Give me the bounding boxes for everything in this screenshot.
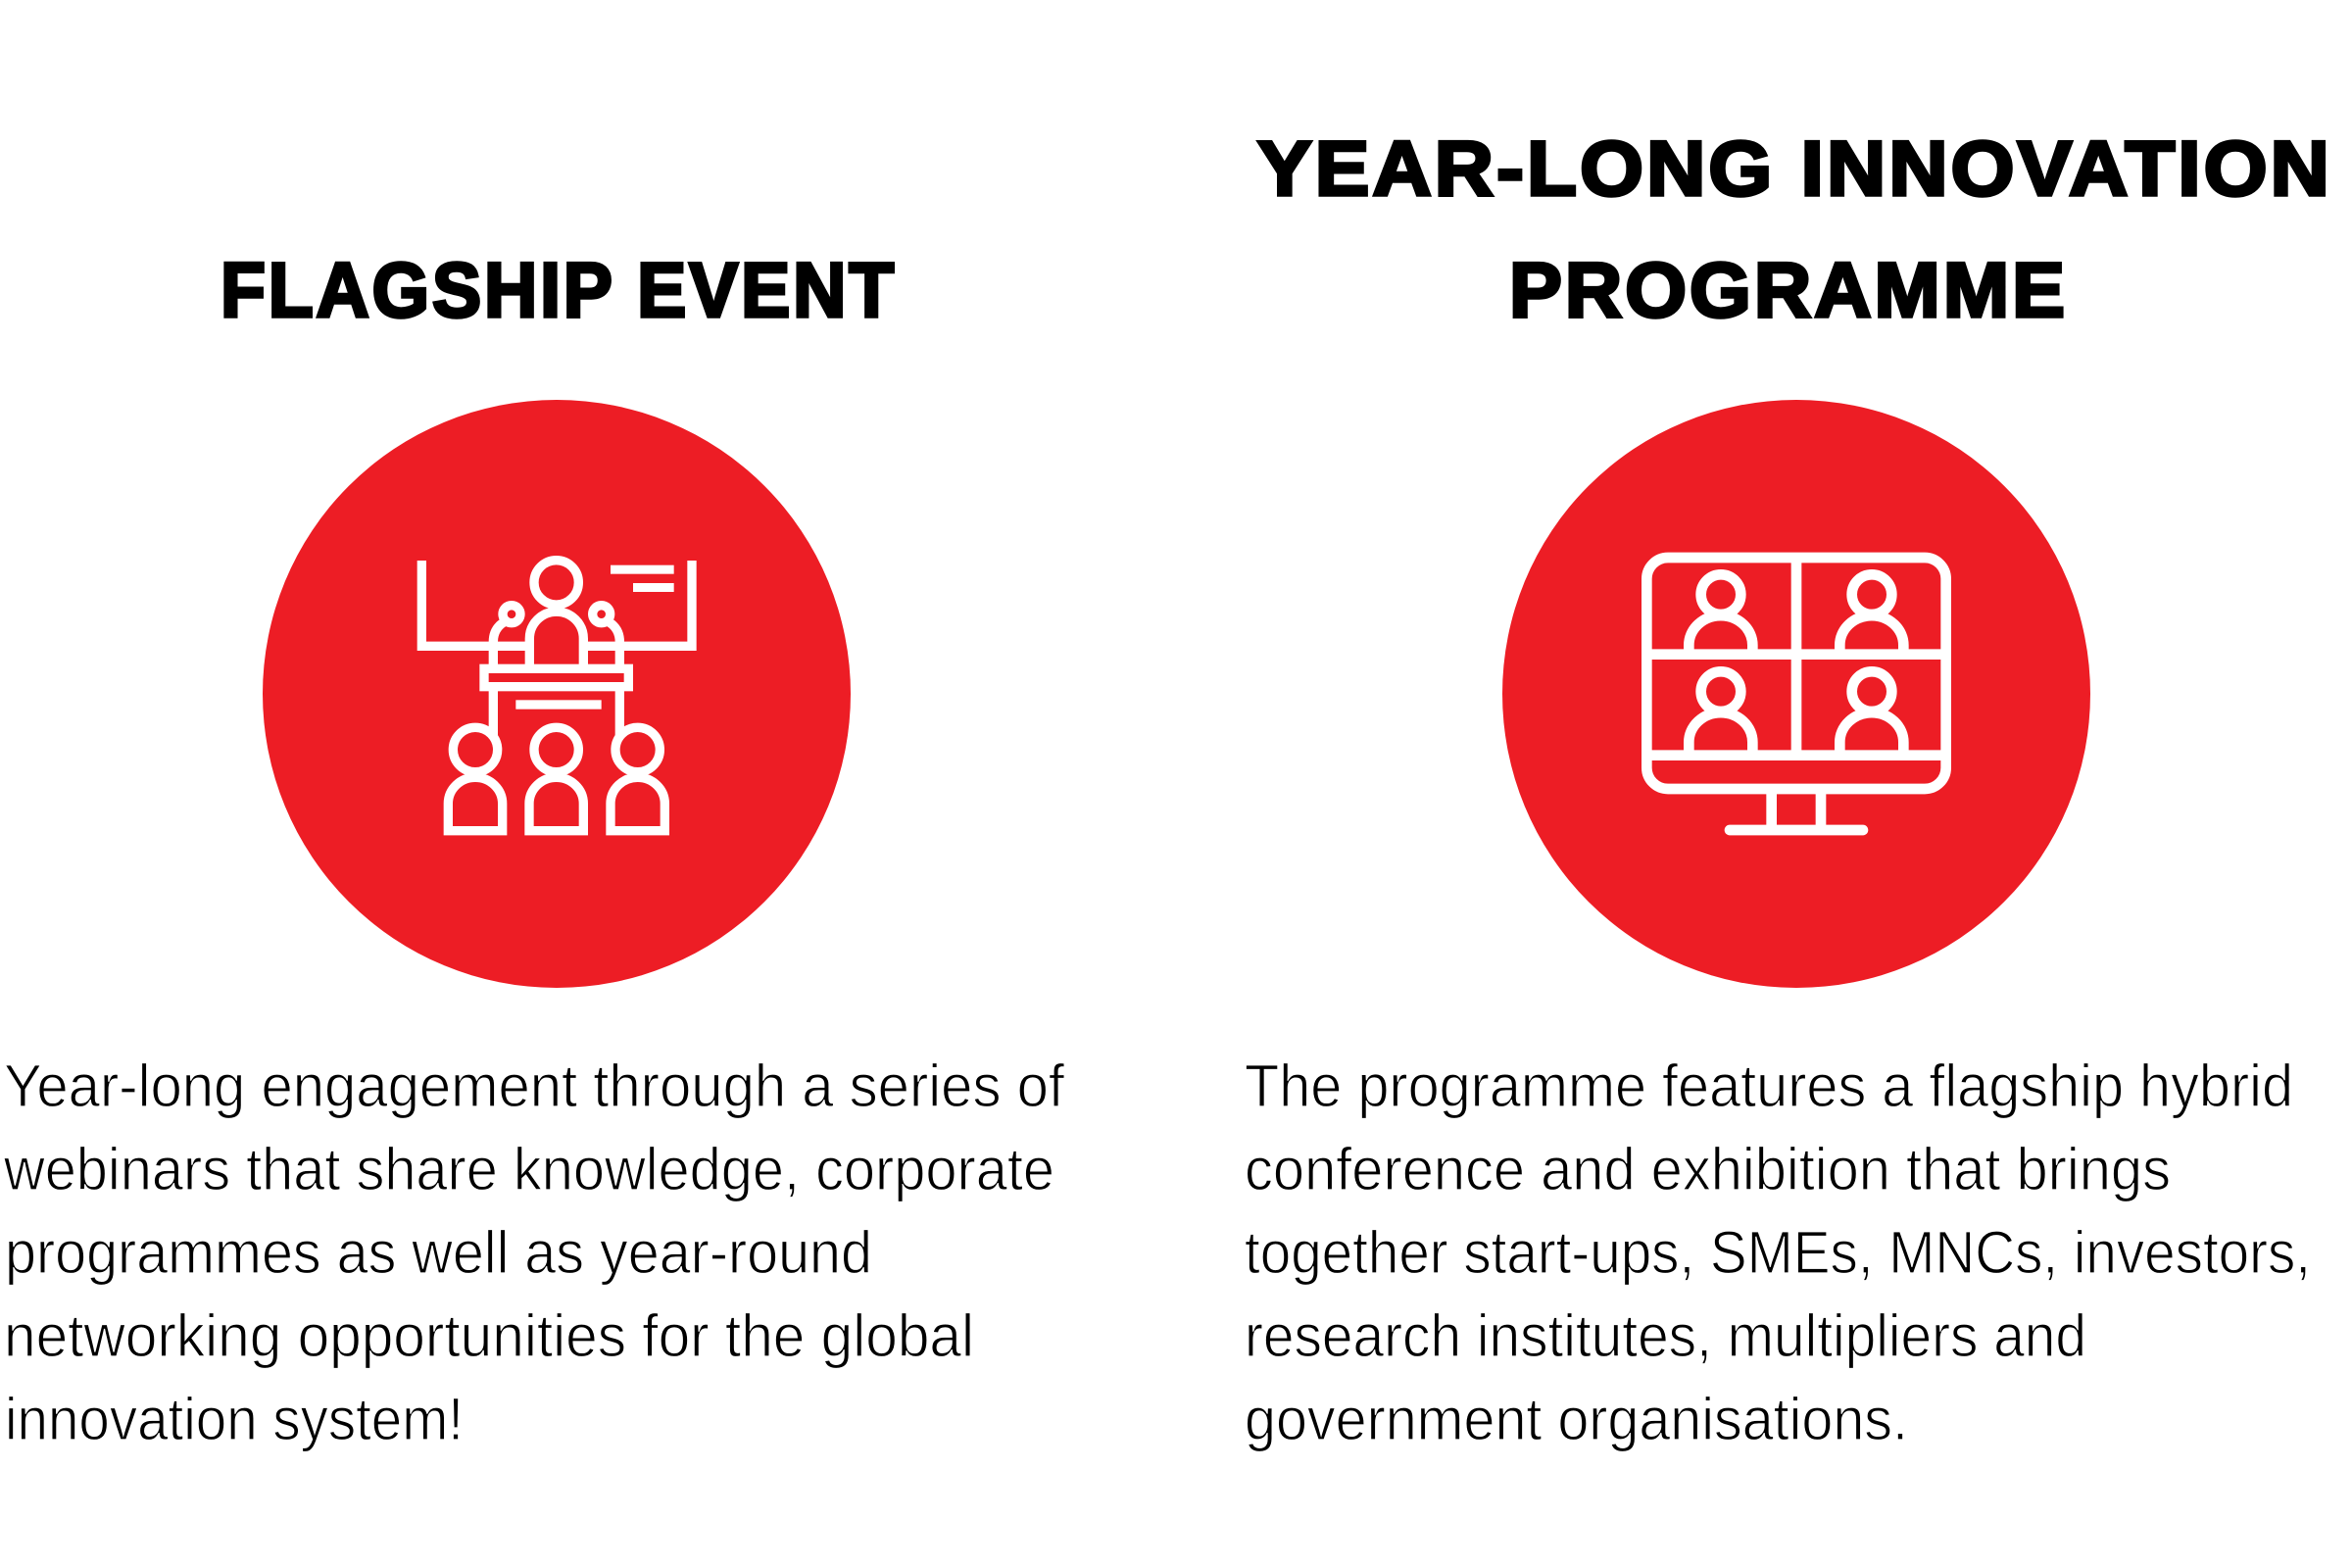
panel: year-long innovation programme [1245,124,2332,1452]
body text: flagship event: networking opportunities for the global [4,1302,974,1369]
body text: programme: conference and exhibition that brings [1245,1136,2171,1202]
heading: year-long innovation programme: YEAR-LONG INNOVATION [1257,124,2332,212]
red circle: flagship event [263,400,851,988]
heading: year-long innovation programme [1257,124,2332,333]
body text: programme: research institutes, multipliers and [1245,1302,2086,1369]
body text: flagship event: Year-long engagement through a series of [4,1053,1065,1119]
red circle: programme [1502,400,2090,988]
body text: programme [1245,1053,2311,1452]
body text: programme: The programme features a flagship hybrid [1245,1053,2293,1119]
icon: monitor with video call participants [1646,558,1946,830]
body text: flagship event: programmes as well as year-round [5,1219,872,1286]
body text: flagship event: innovation system! [5,1386,464,1452]
heading: year-long innovation programme: PROGRAMME [1509,246,2068,333]
body text: flagship event: webinars that share knowledge, corporate [3,1136,1054,1202]
panel: flagship event [3,246,1065,1452]
icon: speaker at lectern with audience [421,561,692,831]
heading: flagship event: FLAGSHIP EVENT [220,246,897,333]
body text: flagship event [3,1053,1065,1452]
body text: programme: government organisations. [1245,1386,1908,1452]
